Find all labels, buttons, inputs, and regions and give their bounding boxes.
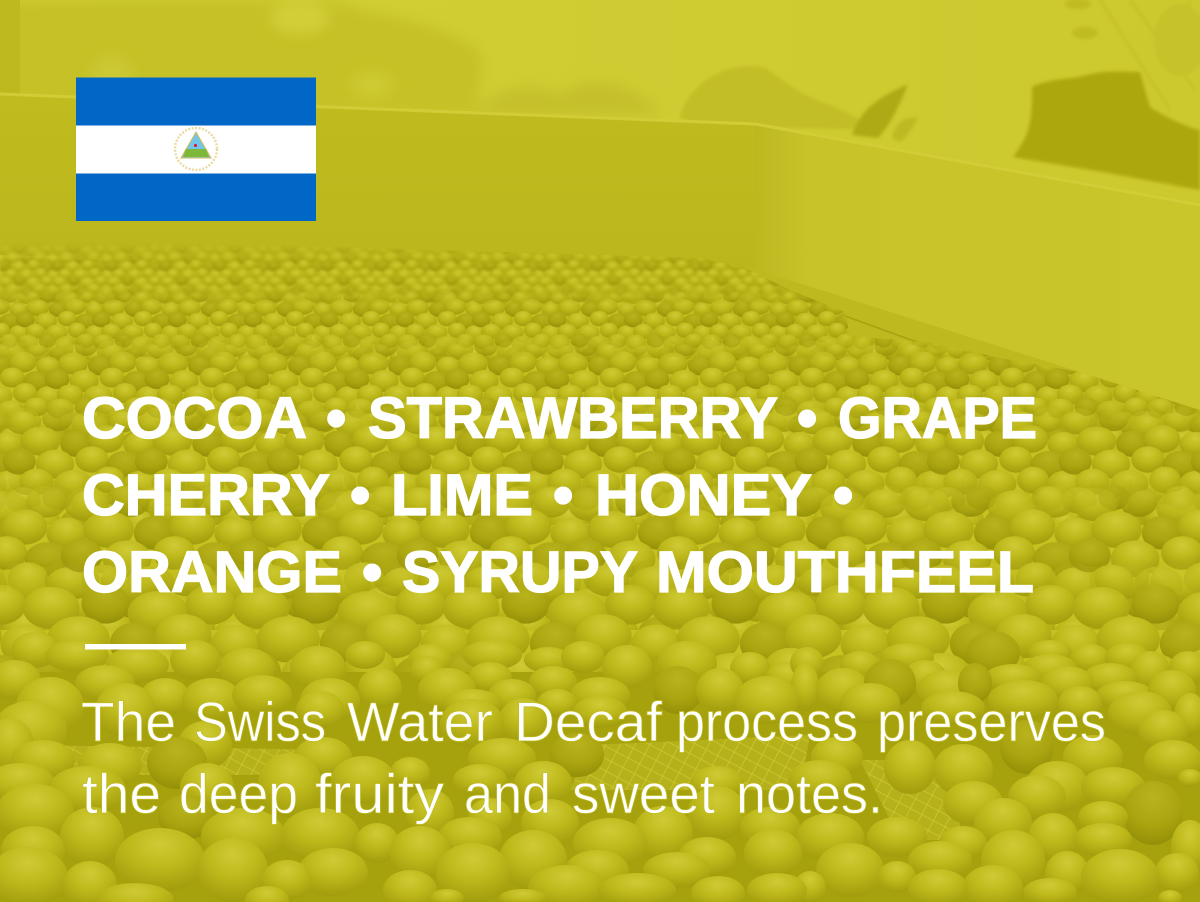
mesh patches — [20, 735, 960, 840]
divider rule — [85, 644, 186, 650]
line 3: ORANGE — [82, 540, 342, 605]
line 1: GRAPE — [838, 386, 1037, 451]
line 2: HONEY — [595, 463, 812, 528]
heading: flavour notes — [82, 386, 1037, 605]
body line 2: fruity — [315, 762, 444, 825]
shadow base under foreground — [0, 672, 1200, 902]
body line 1: Decaf — [514, 690, 662, 753]
body line 2: and — [464, 762, 551, 825]
seam line — [845, 316, 928, 346]
line 3: • — [362, 540, 382, 605]
line 2: • — [553, 463, 573, 528]
left wall — [0, 93, 755, 275]
trees at upper left — [0, 0, 660, 115]
line 1: COCOA — [82, 386, 307, 451]
body line 2: deep — [179, 762, 298, 825]
line 3: MOUTHFEEL — [656, 540, 1034, 605]
post at far left — [0, 0, 20, 95]
body line 1: The — [81, 690, 176, 753]
right wall — [755, 124, 1200, 420]
body line 1 — [81, 690, 1106, 753]
body line 2 — [82, 762, 883, 825]
line 1 — [82, 386, 1037, 451]
tree branches at top right — [1065, 0, 1200, 110]
coffee cherries, growing toward the foreground — [0, 240, 1200, 902]
body line 1: Swiss — [194, 690, 326, 753]
wall rim highlight — [0, 94, 1200, 205]
body text — [81, 690, 1106, 825]
line 3: SYRUPY — [402, 540, 638, 605]
icon: coat of arms — [175, 128, 217, 170]
line 2: • — [350, 463, 370, 528]
line 1: • — [326, 386, 346, 451]
line 2: • — [833, 463, 853, 528]
line 1: STRAWBERRY — [368, 386, 778, 451]
Nicaraguan flag — [76, 78, 316, 221]
line 2: LIME — [391, 463, 533, 528]
line 2 — [82, 463, 853, 528]
body line 2: sweet — [572, 762, 715, 825]
mesh floor at back — [700, 266, 1200, 460]
body line 2: notes. — [736, 762, 883, 825]
foreground cherries — [0, 631, 1200, 902]
body line 1: Water — [347, 690, 493, 753]
line 3 — [82, 540, 1034, 605]
sky — [0, 0, 1200, 260]
foliage behind the wall — [680, 0, 1200, 190]
body line 2: the — [82, 762, 161, 825]
body line 1: preserves — [877, 690, 1106, 753]
line 1: • — [797, 386, 817, 451]
line 2: CHERRY — [82, 463, 330, 528]
dark tarp plants at right — [1013, 72, 1200, 190]
body line 1: process — [676, 690, 858, 753]
